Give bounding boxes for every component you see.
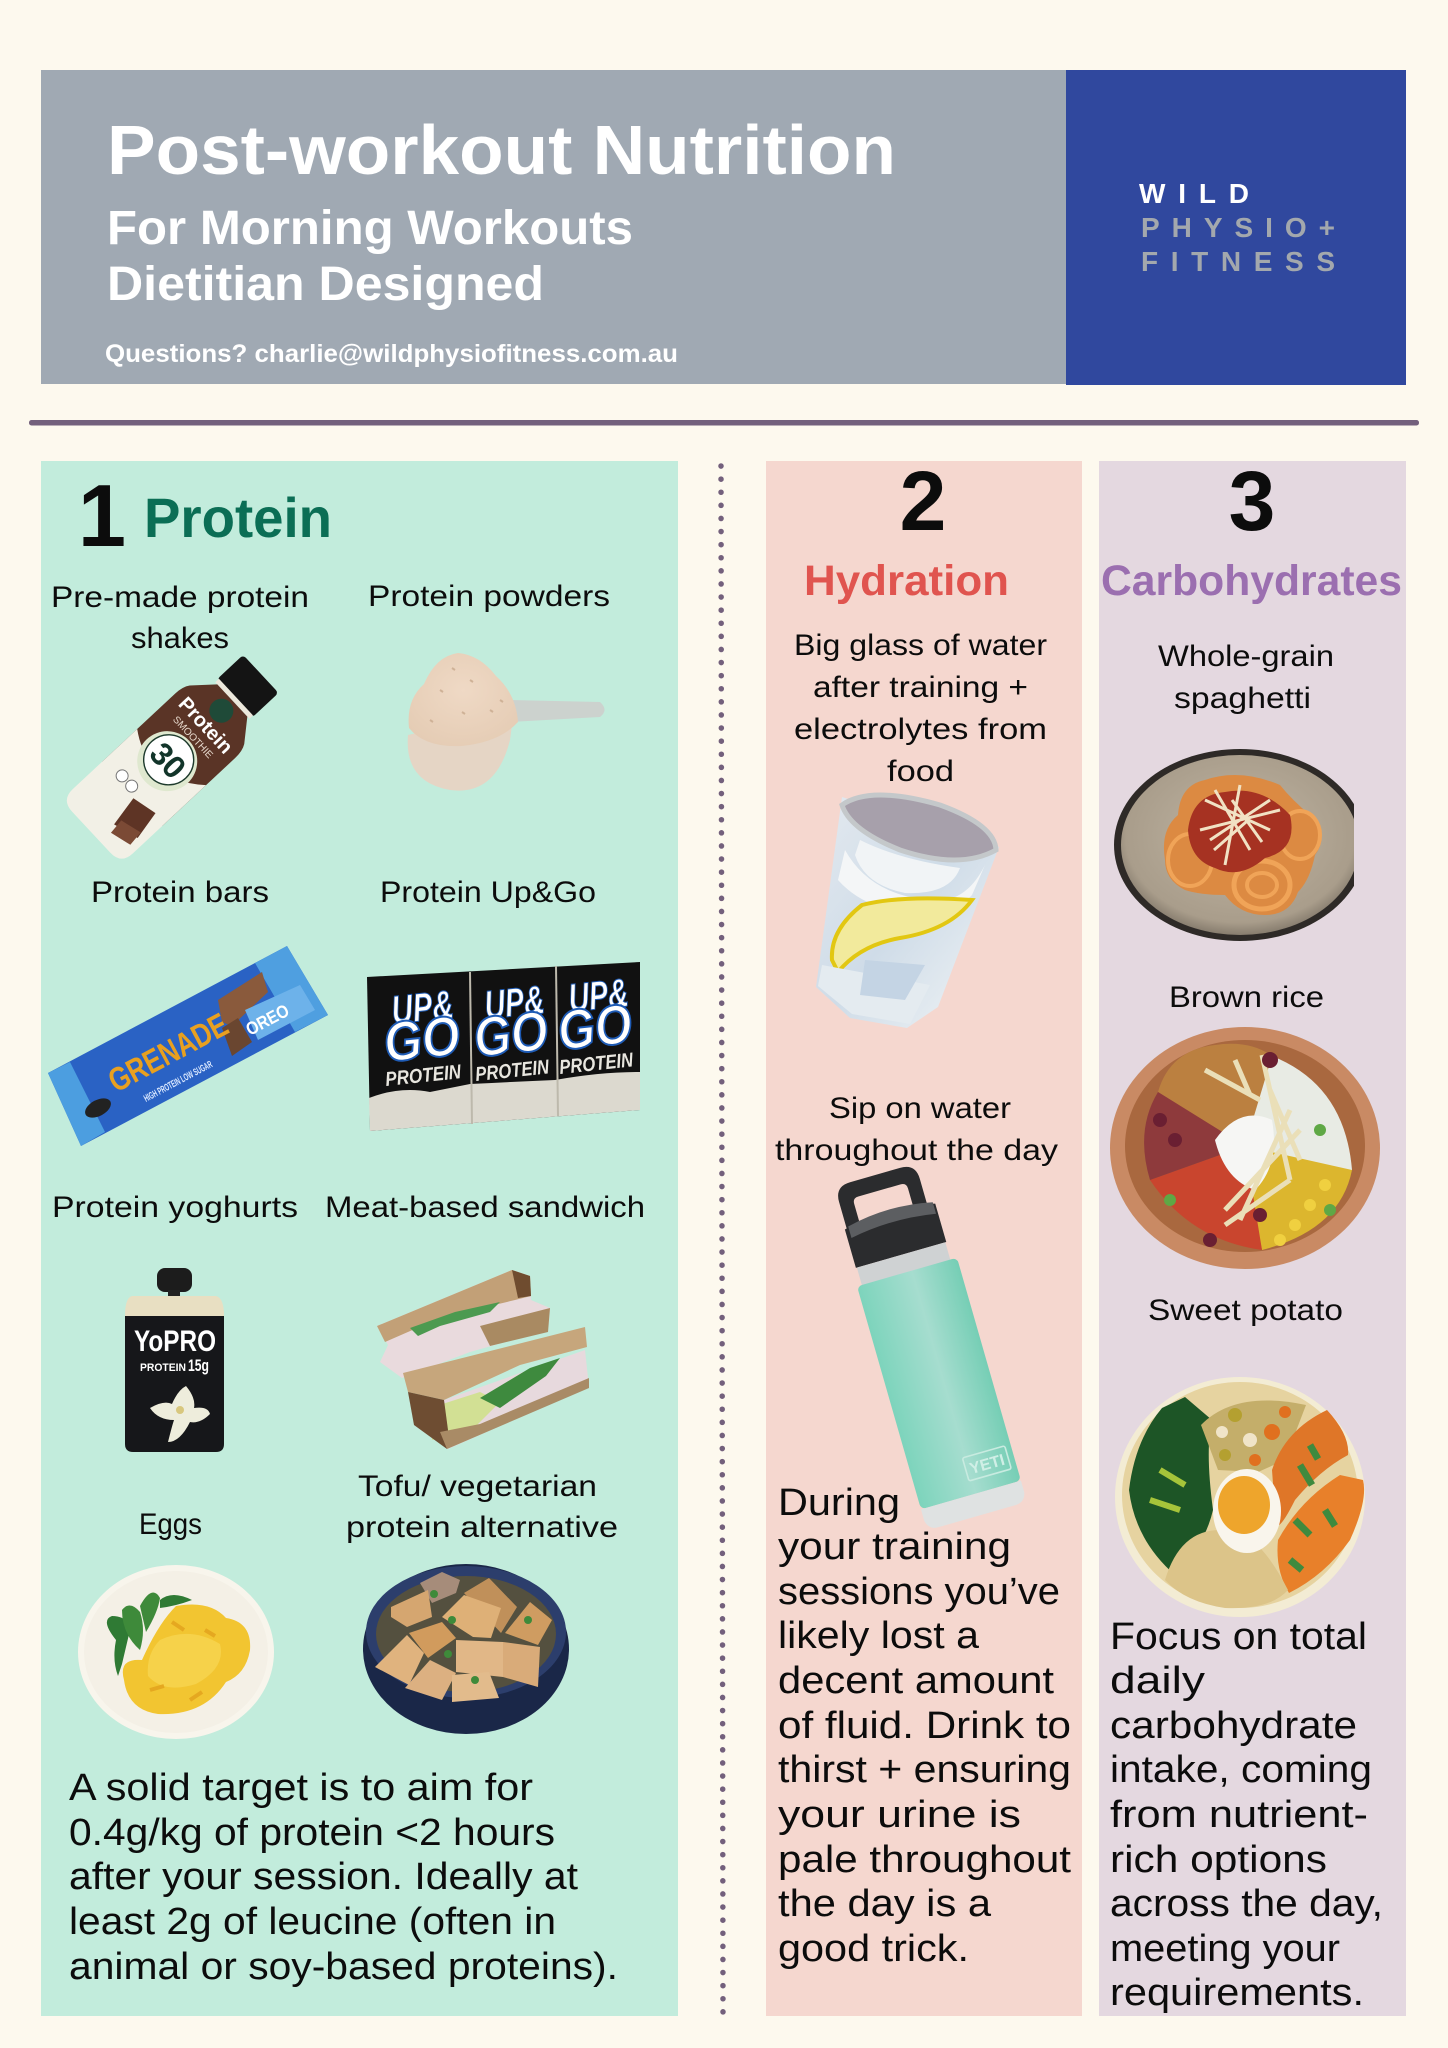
protein paragraph: animal or soy-based proteins). xyxy=(69,1946,618,1988)
image: up and go cartons: PROTEIN xyxy=(558,1049,635,1079)
contact line: Questions? charlie@wildphysiofitness.com.au xyxy=(105,340,678,368)
image: protein powder scoop xyxy=(408,653,604,791)
water glass label: food xyxy=(887,755,954,788)
image: up and go cartons: GO xyxy=(471,999,551,1069)
logo panel: FITNESS xyxy=(1141,246,1335,277)
section number 3: 3 xyxy=(1229,454,1275,548)
image: teal bottle: YETI xyxy=(968,1452,1007,1478)
image: protein bar xyxy=(48,946,328,1146)
label: tofu vegetarian protein alternative: protein alternative xyxy=(346,1511,618,1544)
image: yopro pouch: YoPRO xyxy=(134,1325,216,1358)
label: whole-grain spaghetti: Whole-grain xyxy=(1158,640,1334,673)
hydration paragraph xyxy=(778,1482,1071,1970)
label: pre-made protein shakes xyxy=(51,581,309,655)
water bottle label: Sip on water xyxy=(829,1092,1011,1125)
label: tofu vegetarian protein alternative: Tofu/ vegetarian xyxy=(358,1470,597,1503)
hydration heading: Hydration xyxy=(804,557,1009,605)
hydration paragraph: your training xyxy=(778,1526,1011,1568)
image: up and go cartons: PROTEIN xyxy=(384,1061,463,1091)
panel: protein xyxy=(41,461,678,2016)
hydration paragraph: decent amount xyxy=(778,1660,1054,1702)
hydration paragraph: your urine is xyxy=(778,1794,1021,1836)
carbohydrates paragraph: requirements. xyxy=(1110,1972,1364,2014)
label: protein powders: Protein powders xyxy=(368,580,610,613)
image: protein bar: GRENADE xyxy=(102,1005,234,1099)
image: yopro pouch: 15g xyxy=(188,1356,209,1375)
water glass label xyxy=(794,629,1047,788)
protein heading: Protein xyxy=(144,486,332,549)
water bottle label: throughout the day xyxy=(775,1134,1058,1167)
label: pre-made protein shakes: Pre-made protein xyxy=(51,581,309,614)
carbohydrates paragraph: carbohydrate xyxy=(1110,1705,1357,1747)
label: pre-made protein shakes: shakes xyxy=(131,622,229,655)
label: tofu vegetarian protein alternative xyxy=(346,1470,618,1544)
image: up and go cartons: UP& xyxy=(482,978,547,1028)
water glass label: Big glass of water xyxy=(794,629,1047,662)
hydration paragraph: During xyxy=(778,1482,900,1524)
image: sweet potato bowl xyxy=(1115,1377,1365,1617)
carbohydrates paragraph: intake, coming xyxy=(1110,1749,1372,1791)
logo panel: PHYSIO+ xyxy=(1141,212,1335,243)
protein paragraph: after your session. Ideally at xyxy=(69,1856,578,1898)
image: up and go cartons: UP& xyxy=(566,971,631,1021)
label: meat-based sandwich: Meat-based sandwich xyxy=(325,1191,645,1224)
water glass label: electrolytes from xyxy=(794,713,1047,746)
panel: carbohydrates xyxy=(1099,454,1406,2016)
logo panel: WILD xyxy=(1139,178,1249,209)
carbohydrates paragraph: daily xyxy=(1110,1660,1205,1702)
image: sandwich xyxy=(377,1270,589,1449)
hydration paragraph: pale throughout xyxy=(778,1839,1071,1881)
image: protein shake bottle: Protein xyxy=(174,693,237,758)
carbohydrates heading: Carbohydrates xyxy=(1101,557,1402,605)
subtitle line 1: For Morning Workouts xyxy=(107,202,633,255)
hydration paragraph: the day is a xyxy=(778,1883,992,1925)
hydration paragraph: good trick. xyxy=(778,1928,969,1970)
subtitle line 2: Dietitian Designed xyxy=(107,258,544,311)
water bottle label xyxy=(775,1092,1058,1167)
carbohydrates paragraph xyxy=(1110,1616,1383,2014)
image: up and go cartons: GO xyxy=(381,1003,463,1074)
title: Post-workout Nutrition xyxy=(107,111,896,189)
header panel xyxy=(41,70,1067,384)
label: whole-grain spaghetti: spaghetti xyxy=(1174,682,1311,715)
logo panel xyxy=(1066,70,1406,385)
carbohydrates paragraph: meeting your xyxy=(1110,1928,1340,1970)
label: protein yoghurts: Protein yoghurts xyxy=(52,1191,298,1224)
image: water glass with lemon xyxy=(816,795,999,1028)
image: protein bar: OREO xyxy=(242,1000,292,1040)
image: protein shake bottle xyxy=(61,642,291,864)
label: brown rice: Brown rice xyxy=(1169,981,1324,1014)
hydration paragraph: thirst + ensuring xyxy=(778,1749,1071,1791)
carbohydrates paragraph: rich options xyxy=(1110,1839,1327,1881)
image: yopro pouch: PROTEIN xyxy=(140,1362,186,1374)
image: spaghetti plate xyxy=(1114,749,1366,941)
image: up and go cartons: UP& xyxy=(389,983,456,1033)
image: rice bowl xyxy=(1110,1027,1380,1269)
hydration paragraph: of fluid. Drink to xyxy=(778,1705,1071,1747)
carbohydrates paragraph: from nutrient- xyxy=(1110,1794,1368,1836)
hydration paragraph: sessions you’ve xyxy=(778,1571,1060,1613)
label: protein bars: Protein bars xyxy=(91,876,269,909)
section number 1: 1 xyxy=(78,466,126,565)
image: protein shake bottle: SMOOTHIE xyxy=(170,714,215,761)
water glass label: after training + xyxy=(813,671,1028,704)
carbohydrates paragraph: Focus on total xyxy=(1110,1616,1367,1658)
protein paragraph: 0.4g/kg of protein <2 hours xyxy=(69,1812,555,1854)
protein paragraph: A solid target is to aim for xyxy=(69,1767,533,1809)
protein paragraph xyxy=(69,1767,618,1988)
label: eggs: Eggs xyxy=(139,1508,202,1541)
hydration paragraph: likely lost a xyxy=(778,1615,980,1657)
section number 2: 2 xyxy=(900,454,946,548)
image: scrambled eggs plate xyxy=(78,1565,274,1739)
label: protein up and go: Protein Up&Go xyxy=(380,876,596,909)
image: teal bottle xyxy=(829,1160,1027,1530)
label: sweet potato: Sweet potato xyxy=(1148,1294,1343,1327)
image: up and go cartons: PROTEIN xyxy=(474,1056,551,1086)
image: protein shake bottle: 30 xyxy=(143,735,193,786)
image: tofu bowl xyxy=(363,1564,569,1734)
label: whole-grain spaghetti xyxy=(1158,640,1334,715)
protein paragraph: least 2g of leucine (often in xyxy=(69,1901,556,1943)
panel: hydration xyxy=(766,454,1082,2016)
image: up and go cartons xyxy=(367,962,640,1131)
carbohydrates paragraph: across the day, xyxy=(1110,1883,1383,1925)
image: yopro pouch xyxy=(125,1268,224,1452)
image: protein bar: HIGH PROTEIN LOW SUGAR xyxy=(142,1059,215,1105)
image: up and go cartons: GO xyxy=(555,992,635,1062)
